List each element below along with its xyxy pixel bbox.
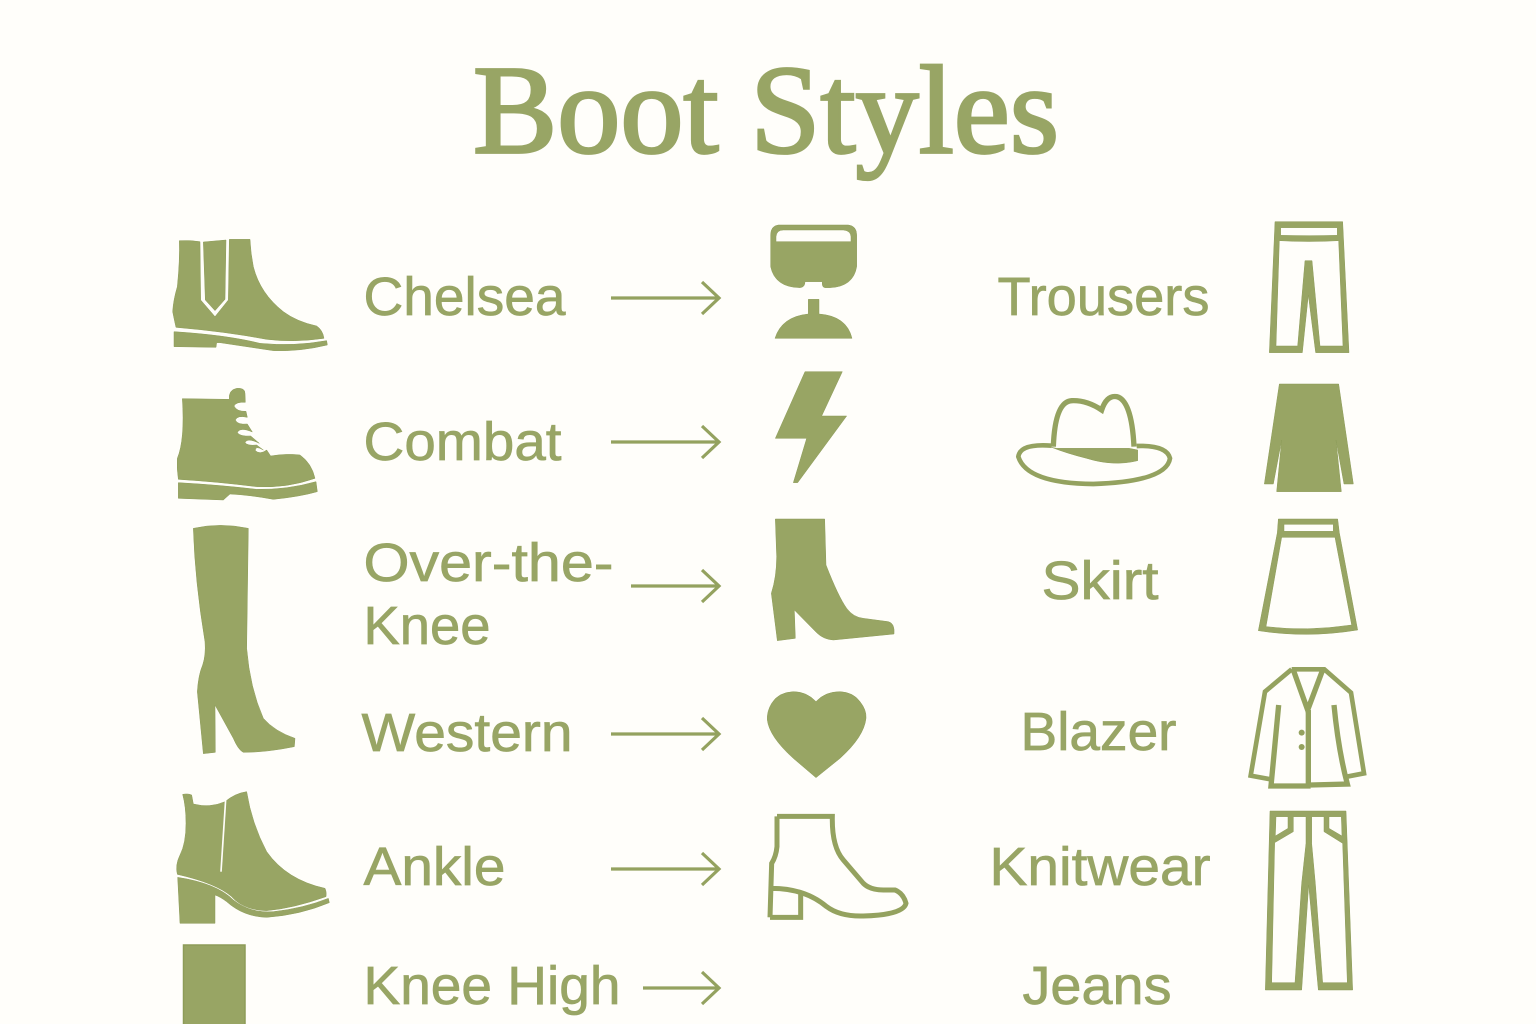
label: Blazer: Blazer <box>1020 702 1177 762</box>
icon: Chelsea boot <box>173 239 327 351</box>
arrow: Knee High <box>643 972 719 1004</box>
label: Over-the-Knee: Knee <box>364 596 490 656</box>
arrow: Over-the-Knee <box>631 570 719 602</box>
row: Over-the-Knee <box>193 519 1358 754</box>
icon: heart <box>767 692 866 778</box>
icon: sweater <box>1264 384 1353 492</box>
arrow: Combat <box>611 426 719 458</box>
arrow: Chelsea <box>611 282 719 314</box>
label: Over-the-Knee: Over-the- <box>364 533 614 593</box>
icon: outline boot <box>770 816 906 917</box>
icon: blazer <box>1251 669 1364 787</box>
label: Ankle: Ankle <box>364 837 506 897</box>
icon: skirt <box>1258 519 1358 634</box>
icon: hat <box>1018 396 1170 484</box>
row: Chelsea <box>173 222 1349 353</box>
label: Combat: Combat <box>364 412 562 472</box>
row: Western <box>362 669 1364 787</box>
icon: side boot <box>771 519 894 641</box>
arrow: Ankle <box>611 853 719 885</box>
arrow: Western <box>611 718 719 750</box>
row: Knee High <box>184 945 1172 1024</box>
label: Skirt: Skirt <box>1042 551 1158 611</box>
label: Western: Western <box>362 703 572 763</box>
icon: Combat boot <box>177 388 317 500</box>
title: Boot Styles <box>473 42 1059 180</box>
icon: trousers <box>1269 222 1349 353</box>
label: Knee High: Knee High <box>364 956 620 1016</box>
row: Ankle <box>177 792 1353 990</box>
label: Over-the-Knee <box>364 533 614 656</box>
icon: lightning bolt <box>775 372 847 483</box>
icon: goblet <box>771 225 857 338</box>
icon: knee-high boot <box>184 945 245 1024</box>
icon: ankle boot <box>177 792 329 923</box>
label: Trousers: Trousers <box>998 267 1210 327</box>
label: Knitwear: Knitwear <box>990 837 1211 897</box>
icon: over-the-knee boot <box>193 525 295 754</box>
row: Combat <box>177 372 1353 500</box>
label: Chelsea: Chelsea <box>364 267 566 327</box>
label: Jeans: Jeans <box>1022 956 1172 1016</box>
icon: jeans <box>1265 811 1353 990</box>
